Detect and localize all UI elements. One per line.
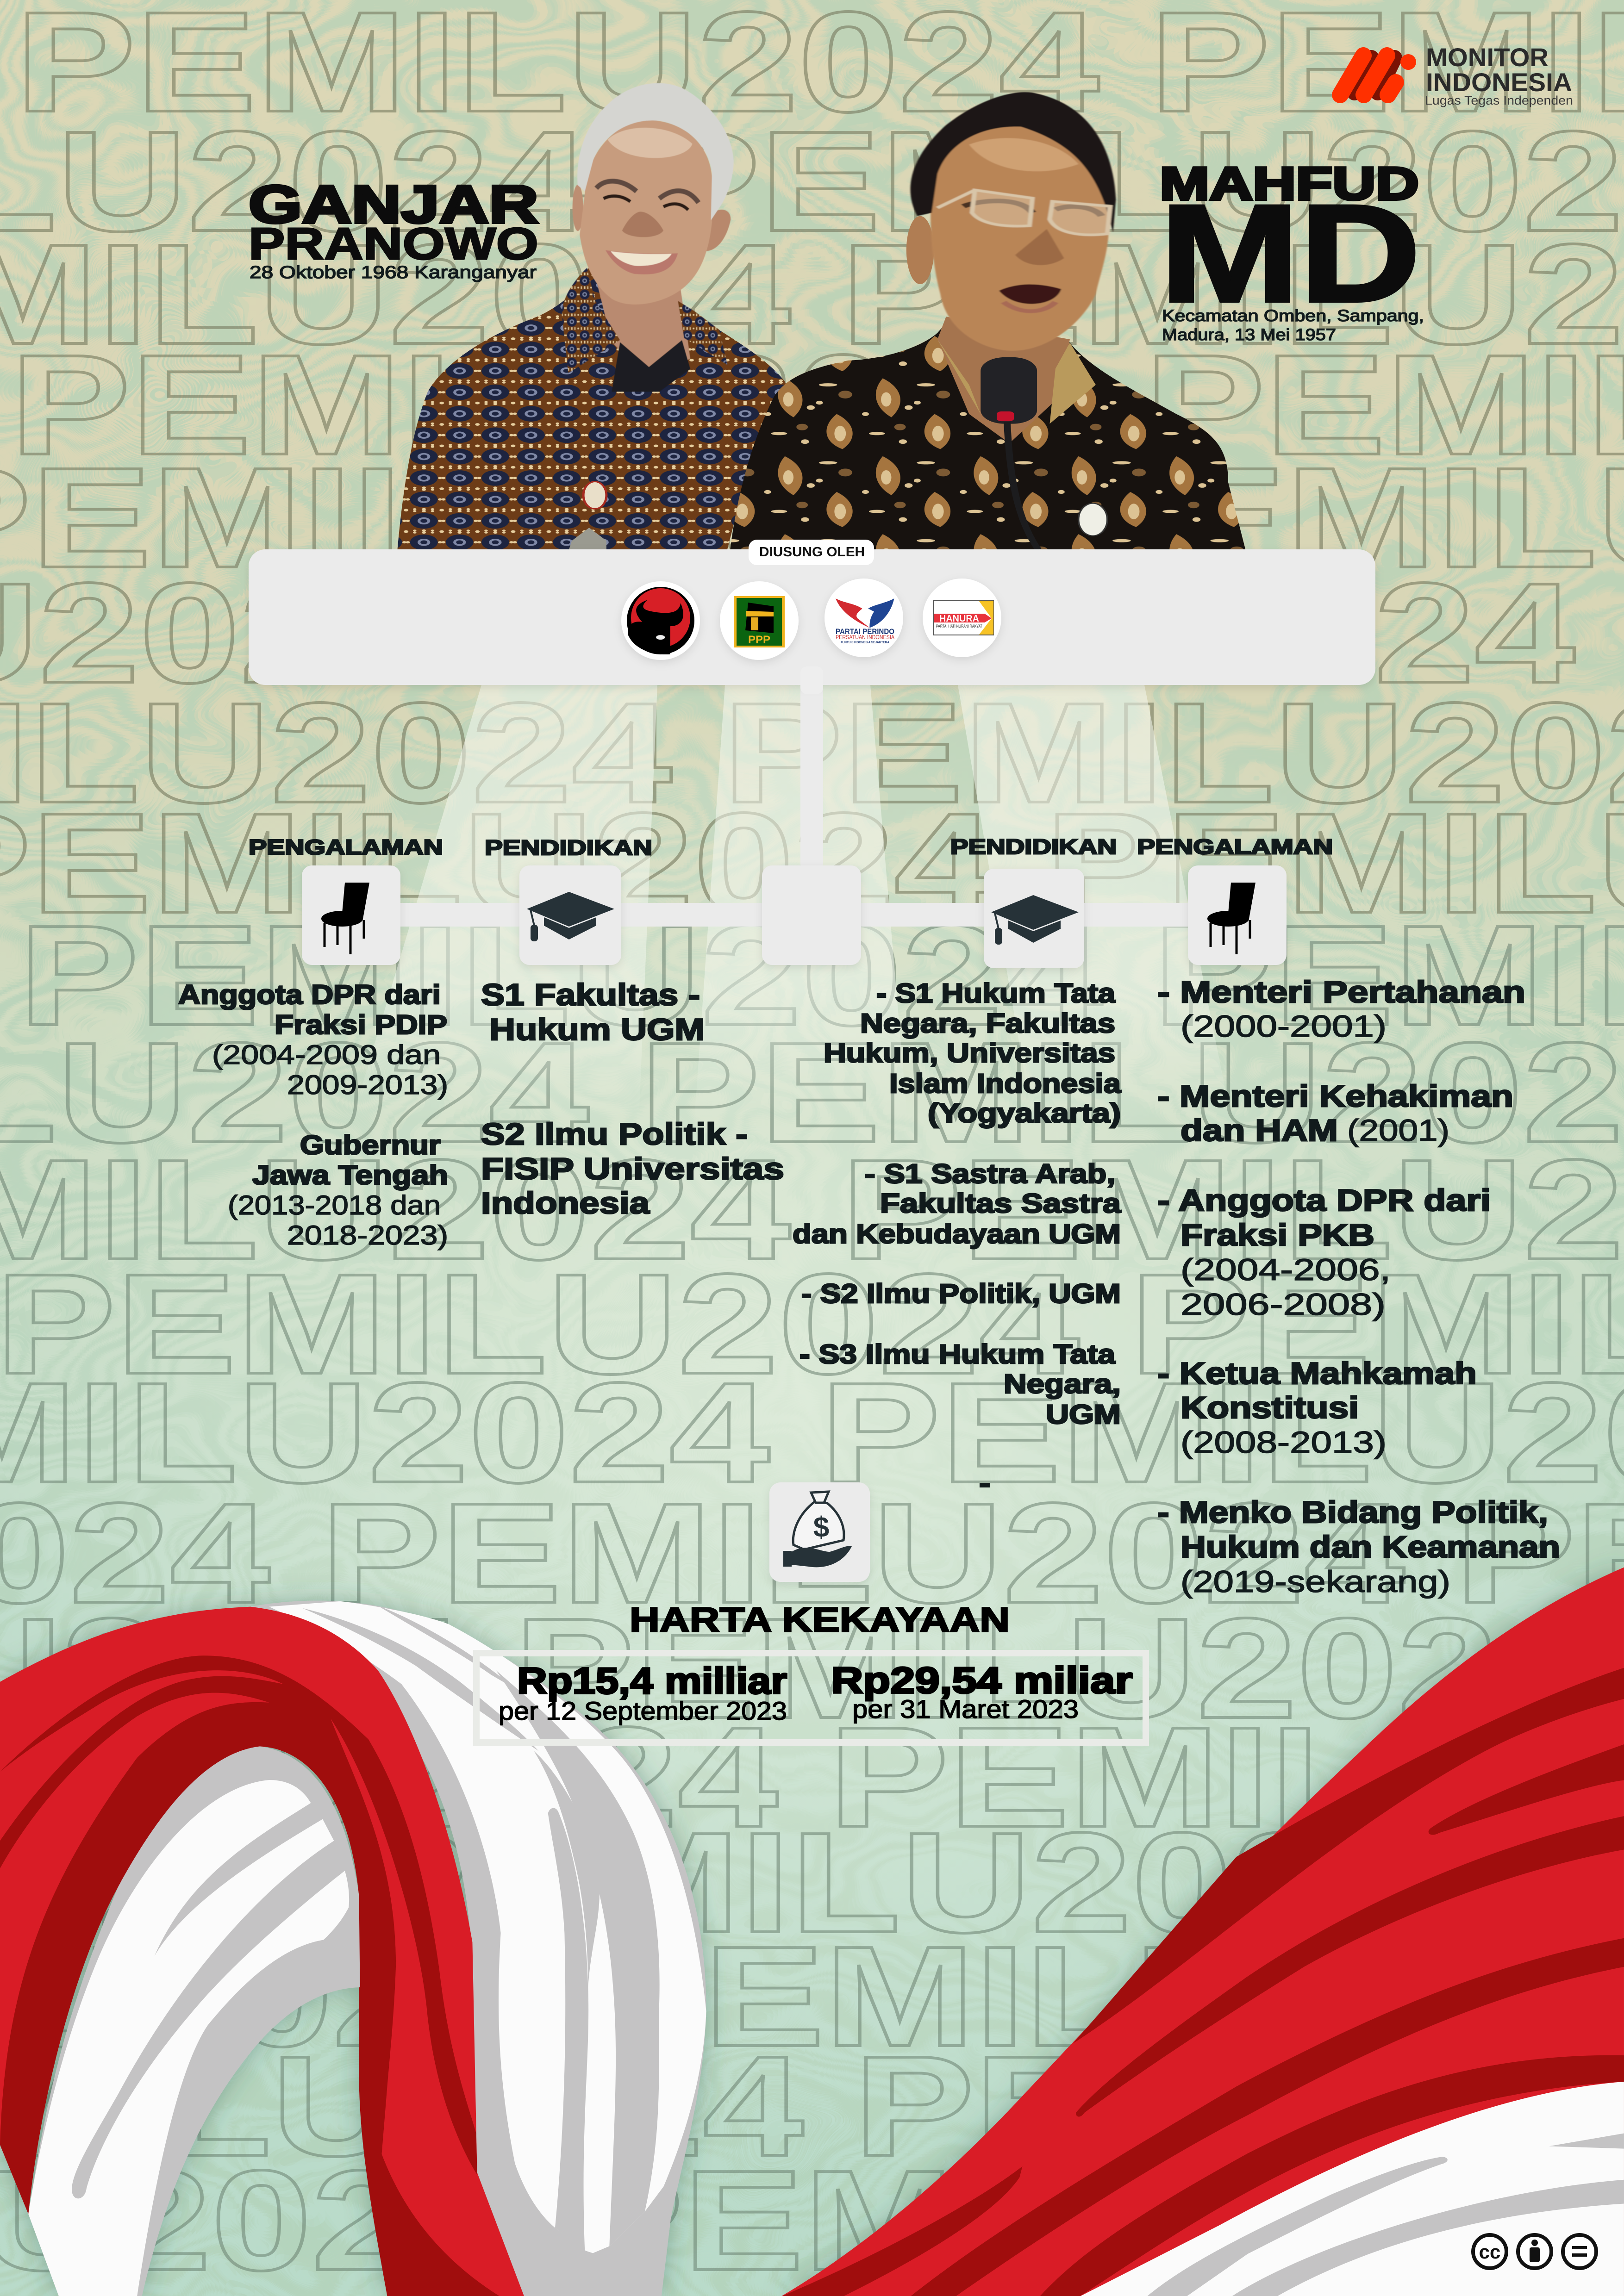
candidate name: Ganjar Pranowo (249, 175, 538, 282)
badge (1079, 504, 1107, 536)
text block: Mahfud experience: (2001) (1347, 1113, 1449, 1147)
text block: Mahfud education: Fakultas Sastra (880, 1188, 1121, 1219)
logo: Monitor Indonesia (1340, 43, 1573, 107)
icon: graduation cap tile right (984, 869, 1084, 968)
grey streaks on white band (302, 1606, 660, 2251)
icon: graduation cap tile left (519, 865, 621, 965)
text block: Mahfud education: Negara, (1004, 1369, 1121, 1399)
text block: Mahfud education: dan Kebudayaan UGM (793, 1219, 1121, 1249)
text block: Mahfud experience: Fraksi PKB (1181, 1218, 1374, 1252)
text block: Mahfud experience: - Menteri Pertahanan (1157, 975, 1525, 1009)
candidate name: Ganjar Pranowo: 28 Oktober 1968 Karanganyar (250, 263, 537, 282)
logo: Hanura (923, 579, 1001, 657)
text block: Ganjar experience: Gubernur (300, 1130, 441, 1160)
dark red folds (0, 1655, 501, 2296)
text block: Ganjar education: Hukum UGM (489, 1012, 705, 1046)
white band (269, 1601, 706, 2253)
icons: Creative Commons licence (1473, 2235, 1596, 2268)
logo: PPP (720, 581, 799, 660)
logo mark (1340, 54, 1416, 95)
text block: Ganjar education: FISIP Universitas (481, 1151, 784, 1186)
icon: attribution (1518, 2235, 1551, 2268)
text block: Ganjar education: S1 Fakultas - (481, 977, 700, 1012)
photo: Mahfud MD (730, 92, 1245, 549)
shirt (397, 268, 787, 549)
text block: Mahfud experience: dan HAM (1181, 1113, 1338, 1147)
text block: Mahfud experience: 2006-2008) (1181, 1287, 1386, 1321)
text block: Ganjar experience: (2013-2018 dan (228, 1190, 441, 1220)
text block: Mahfud experience: (2008-2013) (1181, 1425, 1387, 1459)
heading: PENDIDIKAN Mahfud: PENDIDIKAN (950, 835, 1117, 859)
logo wordmark: MONITOR (1426, 43, 1549, 72)
candidate name: Ganjar Pranowo: PRANOWO (249, 218, 538, 269)
white band (1079, 2082, 1624, 2296)
candidate name: Mahfud MD: Kecamatan Omben, Sampang, (1162, 307, 1424, 325)
logo: Hanura: PARTAI HATI NURANI RAKYAT (936, 624, 982, 628)
text block: Mahfud education: - (979, 1468, 990, 1498)
candidate name: Ganjar Pranowo: GANJAR (249, 175, 538, 234)
text block: Ganjar education (481, 977, 784, 1220)
text block: Mahfud experience: - Anggota DPR dari (1157, 1183, 1491, 1217)
light beams below party panel (352, 685, 1231, 1120)
text block: Ganjar experience: (2004-2009 dan (212, 1040, 441, 1070)
text block: Mahfud education: - S3 Ilmu Hukum Tata (800, 1339, 1116, 1369)
photo: Ganjar Pranowo (397, 83, 787, 549)
text block: Mahfud experience: (2000-2001) (1181, 1009, 1387, 1043)
wealth: Ganjar: Rp15,4 milliar (517, 1660, 787, 1701)
text block: Mahfud education: - S1 Hukum Tata (876, 978, 1116, 1008)
shirt (730, 323, 1245, 549)
logo: Perindo: PERSATUAN INDONESIA (836, 634, 894, 641)
text block: Mahfud experience: (2019-sekarang) (1181, 1564, 1450, 1599)
text block: Mahfud experience: Konstitusi (1181, 1390, 1359, 1425)
label: DIUSUNG OLEH: DIUSUNG OLEH (759, 545, 865, 560)
text block: Mahfud experience: Hukum dan Keamanan (1181, 1530, 1560, 1564)
logo: Perindo: #UNTUK INDONESIA SEJAHTERA (841, 641, 889, 644)
white inner fold (28, 1780, 349, 2296)
icon: money bag tile (769, 1482, 870, 1582)
panel: wealth figures (476, 1653, 1146, 1742)
logo: Hanura: HANURA (939, 614, 979, 624)
candidate name: Mahfud MD: Madura, 13 Mei 1957 (1162, 326, 1336, 344)
text block: Ganjar experience: Fraksi PDIP (275, 1010, 447, 1040)
wealth: Mahfud (831, 1660, 1132, 1724)
red base (780, 1568, 1624, 2296)
wealth: Ganjar (499, 1660, 787, 1725)
ear (906, 216, 934, 284)
dark red folds (780, 1668, 1624, 2296)
microphone (981, 357, 1038, 549)
icon: CC: cc (1479, 2241, 1500, 2263)
icon: CC (1473, 2235, 1506, 2268)
text block: Ganjar experience: Anggota DPR dari (178, 980, 441, 1010)
wealth: Ganjar: per 12 September 2023 (499, 1696, 787, 1725)
text block: Mahfud experience: (2004-2006, (1181, 1252, 1391, 1287)
logo: PDI Perjuangan (621, 581, 700, 660)
text block: Ganjar experience: 2009-2013) (287, 1070, 448, 1100)
grey base of white band (250, 1601, 706, 2296)
logo: PPP: PPP (748, 634, 770, 646)
grey streaks (1146, 2134, 1624, 2296)
text block: Mahfud education: (Yogyakarta) (928, 1098, 1121, 1128)
icon: no derivatives (1563, 2235, 1596, 2268)
logo wordmark: Lugas Tegas Independen (1425, 93, 1573, 107)
text block: Mahfud experience (1157, 975, 1560, 1599)
connector hub tile (762, 865, 861, 965)
icon: chair tile right (1188, 865, 1287, 965)
text block: Ganjar experience: 2018-2023) (287, 1220, 448, 1251)
text block: Mahfud education: Negara, Fakultas (860, 1008, 1115, 1039)
text block: Mahfud education: UGM (1046, 1400, 1121, 1430)
logo: Perindo (824, 579, 903, 657)
neck (937, 317, 1070, 443)
logo wordmark (1425, 43, 1573, 107)
text block: Mahfud experience: - Menteri Kehakiman (1157, 1079, 1513, 1113)
text block: Mahfud education: Islam Indonesia (889, 1069, 1121, 1099)
text block: Ganjar education: Indonesia (481, 1186, 650, 1220)
icon: money bag tile: $ (813, 1512, 829, 1543)
text block: Mahfud experience: - Menko Bidang Politik, (1157, 1495, 1548, 1529)
heading: PENGALAMAN Mahfud: PENGALAMAN (1137, 835, 1333, 859)
label: DIUSUNG OLEH (749, 540, 874, 565)
candidate name: Mahfud MD: MAHFUD (1160, 158, 1419, 210)
connector lines (400, 666, 1188, 927)
head (562, 83, 734, 392)
wealth: Mahfud: Rp29,54 miliar (831, 1660, 1132, 1701)
wealth: Mahfud: per 31 Maret 2023 (852, 1694, 1079, 1724)
head (911, 92, 1116, 351)
candidate name: Mahfud MD (1160, 158, 1424, 344)
icon: chair tile left (302, 865, 400, 965)
red band (0, 1607, 525, 2296)
logo wordmark: INDONESIA (1426, 68, 1572, 97)
text block: Ganjar experience (178, 980, 448, 1251)
flag ribbon: left (0, 1601, 706, 2296)
text block: Mahfud education: Hukum, Universitas (824, 1038, 1115, 1068)
grey inner fold (28, 1746, 360, 2296)
text block: Mahfud education: - S1 Sastra Arab, (865, 1159, 1115, 1189)
flag ribbon: right (780, 1568, 1624, 2296)
text block: Mahfud experience: - Ketua Mahkamah (1157, 1356, 1477, 1390)
heading: HARTA KEKAYAAN: HARTA KEKAYAAN (630, 1600, 1010, 1639)
heading: PENGALAMAN Ganjar: PENGALAMAN (249, 835, 443, 859)
candidate name: Mahfud MD: MD (1160, 175, 1421, 331)
text block: Mahfud education (793, 978, 1121, 1498)
text block: Ganjar experience: Jawa Tengah (252, 1160, 448, 1190)
panel: supporting parties (249, 540, 1375, 694)
text block: Ganjar education: S2 Ilmu Politik - (481, 1117, 748, 1151)
logo: Perindo: PARTAI PERINDO (836, 627, 894, 636)
heading: PENDIDIKAN Ganjar: PENDIDIKAN (485, 836, 652, 859)
text block: Mahfud education: - S2 Ilmu Politik, UGM (801, 1279, 1121, 1309)
